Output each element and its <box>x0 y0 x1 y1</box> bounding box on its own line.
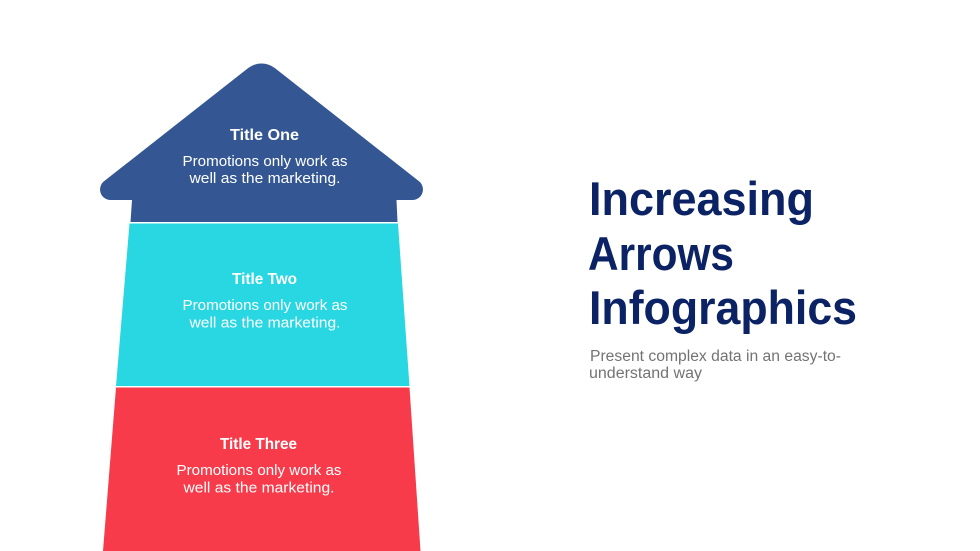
panel: bottom section, title three <box>103 388 420 551</box>
subtitle text block: understand way <box>589 365 702 382</box>
title: Increasing <box>589 172 814 225</box>
title: Arrows <box>588 227 734 280</box>
text block: title two description: Promotions only work as <box>182 298 348 314</box>
red trapezoid <box>103 388 420 551</box>
text block: title one description: Promotions only work as <box>182 154 348 170</box>
arrow head shape <box>100 63 423 222</box>
heading: title two: Title Two <box>232 271 297 288</box>
panel: middle section, title two <box>116 224 410 386</box>
title: Infographics <box>589 281 857 334</box>
panel: arrow head, title one <box>100 63 423 222</box>
cyan trapezoid <box>116 224 410 386</box>
heading: title three: Title Three <box>220 436 297 453</box>
subtitle text block: Present complex data in an easy-to- <box>590 348 841 365</box>
text block: title one description: well as the marketing. <box>188 171 340 187</box>
text block: title two description: well as the marketing. <box>188 316 340 332</box>
text block: title three description: well as the marketing. <box>182 480 334 496</box>
text block: title three description: Promotions only work as <box>176 463 342 479</box>
heading: title one: Title One <box>230 127 299 144</box>
